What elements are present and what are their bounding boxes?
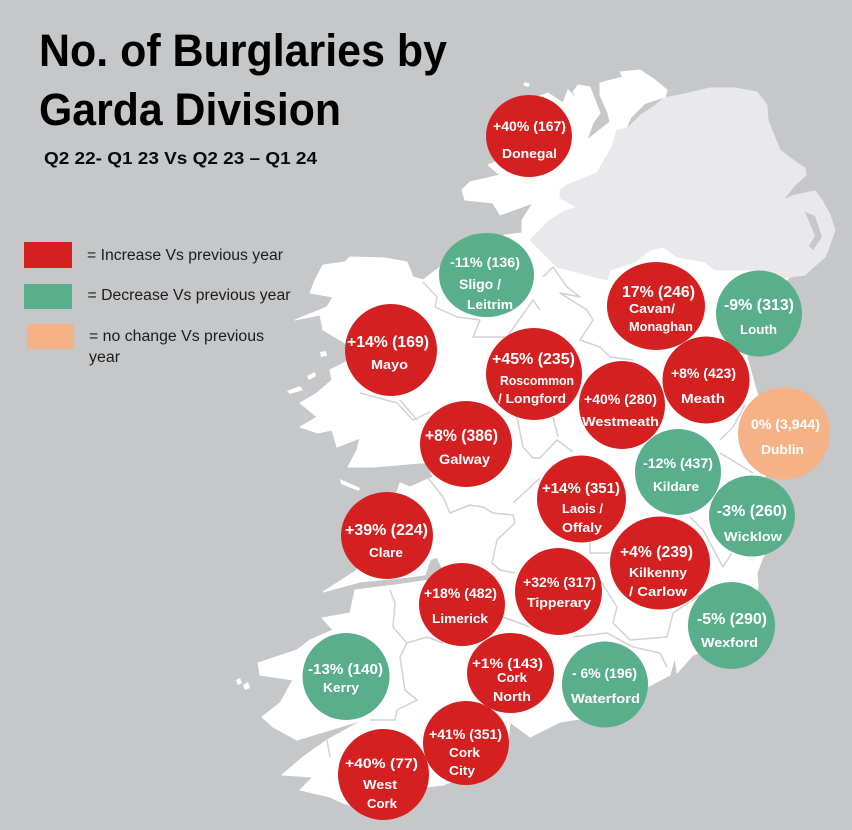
legend: no change: = no change Vs previous	[89, 328, 264, 345]
division: Clare	[341, 492, 433, 579]
title: Garda Division	[39, 84, 341, 135]
title: No. of Burglaries by	[39, 25, 447, 76]
legend: no change	[27, 324, 264, 366]
division: Cork City	[423, 701, 509, 785]
division: Wicklow: -3% (260)	[717, 503, 787, 520]
division: Cavan / Monaghan	[607, 262, 705, 350]
division: Dublin	[738, 388, 830, 480]
map of Ireland	[236, 70, 835, 815]
division: Kildare: Kildare	[653, 479, 699, 494]
division: Galway	[420, 401, 512, 487]
division: West Cork: +40% (77)	[345, 755, 418, 771]
legend: no change: year	[89, 349, 120, 366]
division: Kerry	[302, 633, 390, 720]
division: Kildare	[635, 429, 721, 515]
division: Wexford: -5% (290)	[697, 611, 767, 628]
division: Mayo: Mayo	[371, 357, 408, 372]
division: Donegal	[486, 95, 572, 177]
division: Kilkenny / Carlow: / Carlow	[629, 584, 688, 599]
division: Galway: +8% (386)	[425, 427, 498, 445]
division: Wexford	[688, 582, 775, 669]
division: Limerick	[419, 563, 505, 646]
division: Limerick: +18% (482)	[424, 585, 497, 601]
map: offshore islands	[236, 82, 530, 690]
map: county borders	[327, 267, 753, 757]
legend	[24, 242, 290, 366]
division: Kerry: -13% (140)	[308, 661, 383, 678]
division: Tipperary	[515, 548, 602, 635]
division: Roscommon / Longford: +45% (235)	[492, 351, 575, 368]
division: Westmeath	[579, 361, 665, 449]
division: Westmeath: Westmeath	[582, 414, 659, 429]
division: Galway: Galway	[439, 451, 490, 467]
division: Kilkenny / Carlow	[610, 516, 710, 610]
division: Kildare: -12% (437)	[643, 455, 713, 471]
division: Cavan / Monaghan: 17% (246)	[622, 284, 695, 301]
division: Roscommon / Longford	[486, 328, 582, 420]
division: West Cork	[338, 729, 429, 820]
division: Cavan / Monaghan: Monaghan	[629, 319, 693, 334]
map: Lough Foyle and Strangford Lough	[627, 98, 822, 250]
map: Northern Ireland	[530, 88, 835, 280]
division: Cork North: North	[493, 689, 531, 704]
division: Cork North: +1% (143)	[472, 655, 543, 671]
division: Cavan / Monaghan: Cavan/	[629, 301, 675, 316]
division: Clare: +39% (224)	[345, 522, 428, 539]
division: Sligo / Leitrim: Sligo /	[459, 276, 501, 292]
division: Meath	[662, 336, 750, 424]
division: West Cork: Cork	[367, 796, 398, 811]
division: Louth	[716, 270, 802, 356]
division: Sligo / Leitrim: Leitrim	[467, 297, 513, 312]
division: Laois / Offaly: Laois /	[562, 501, 603, 516]
division: Clare: Clare	[369, 545, 403, 560]
division: Cork City: +41% (351)	[429, 726, 502, 742]
division: Mayo	[345, 304, 437, 396]
division: Laois / Offaly	[537, 456, 626, 542]
division: Donegal: +40% (167)	[493, 118, 566, 134]
division: Cork City: Cork	[449, 745, 481, 760]
division: Tipperary: +32% (317)	[523, 574, 596, 590]
division: Kilkenny / Carlow: Kilkenny	[629, 565, 688, 580]
division: Tipperary: Tipperary	[527, 595, 592, 610]
division: Louth: Louth	[740, 322, 777, 337]
division: Dublin: Dublin	[761, 442, 804, 457]
division: Roscommon / Longford: Roscommon	[500, 373, 574, 388]
division: Waterford	[562, 642, 648, 728]
division: Wicklow: Wicklow	[724, 529, 783, 544]
division: Wexford: Wexford	[701, 635, 758, 650]
division: Mayo: +14% (169)	[347, 334, 429, 351]
division: Kilkenny / Carlow: +4% (239)	[620, 544, 693, 561]
division: Limerick: Limerick	[432, 611, 489, 626]
division: Donegal: Donegal	[502, 146, 557, 161]
division: Laois / Offaly: +14% (351)	[542, 480, 620, 497]
title	[39, 25, 447, 135]
legend: increase: = Increase Vs previous year	[87, 247, 283, 264]
division: Wicklow	[709, 476, 795, 556]
division: Kerry: Kerry	[323, 680, 360, 695]
division: Louth: -9% (313)	[724, 297, 794, 314]
legend: increase	[24, 242, 283, 268]
division: Cork North	[467, 633, 554, 713]
division: Dublin: 0% (3,944)	[751, 416, 820, 432]
legend: decrease	[24, 284, 290, 309]
division: Westmeath: +40% (280)	[584, 391, 657, 407]
division: Meath: Meath	[681, 391, 725, 406]
division: Laois / Offaly: Offaly	[562, 520, 603, 535]
division: Waterford: - 6% (196)	[572, 665, 637, 681]
map: Republic of Ireland landmass	[258, 70, 790, 815]
division: Cork City: City	[449, 763, 476, 778]
division: Sligo / Leitrim	[439, 233, 534, 317]
division: Waterford: Waterford	[571, 691, 640, 706]
subtitle: Q2 22- Q1 23 Vs Q2 23 – Q1 24	[44, 148, 317, 168]
division: Roscommon / Longford: / Longford	[498, 391, 566, 406]
division: West Cork: West	[363, 777, 398, 792]
legend: decrease: = Decrease Vs previous year	[88, 287, 290, 304]
division: Meath: +8% (423)	[671, 365, 736, 381]
division: Sligo / Leitrim: -11% (136)	[450, 254, 520, 270]
division: Cork North: Cork	[497, 670, 528, 685]
